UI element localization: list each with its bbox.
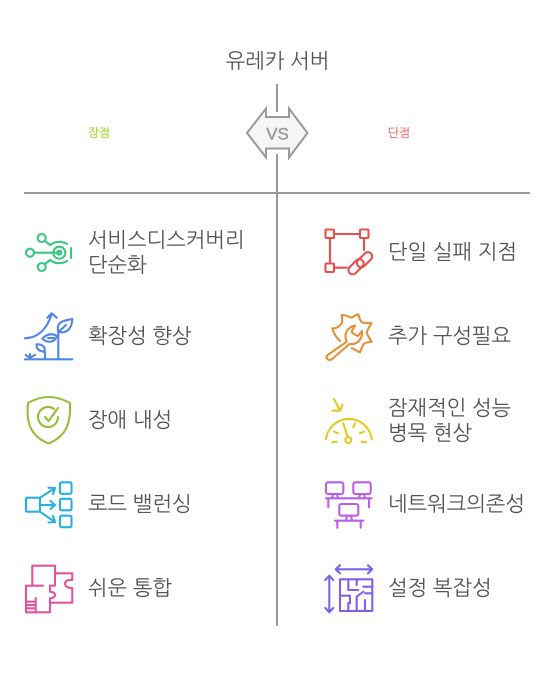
- label: 확장성 향상: [88, 325, 192, 348]
- item: service discovery: [26, 229, 244, 277]
- label: 로드 밸런싱: [88, 493, 192, 516]
- label: 추가 구성필요: [388, 325, 511, 348]
- icon: network nodes: [26, 234, 71, 271]
- item: performance bottleneck: [326, 397, 511, 445]
- icon: gauge: [326, 399, 372, 443]
- item: configuration complexity: [325, 565, 492, 612]
- item: additional configuration: [327, 314, 511, 360]
- item: fault tolerance: [28, 397, 172, 444]
- label: 장애 내성: [88, 409, 172, 432]
- icon: puzzle floor plan: [26, 566, 72, 612]
- icon: maze floor plan: [325, 565, 372, 612]
- item: service discovery: 단순화: [88, 254, 147, 277]
- item: performance bottleneck: 병목 현상: [388, 422, 472, 445]
- icon: shield check: [28, 397, 70, 444]
- label: 네트워크의존성: [388, 493, 525, 516]
- item: single point of failure: [326, 230, 517, 276]
- item: scalability: [25, 313, 192, 359]
- label: 단일 실패 지점: [388, 241, 517, 264]
- VS badge: [247, 108, 308, 158]
- label: 잠재적인 성능: [388, 397, 511, 420]
- label: 서비스디스커버리: [88, 229, 244, 252]
- icon: networked monitors: [326, 482, 372, 528]
- column label: disadvantages: 단점: [388, 126, 410, 140]
- title: 유레카 서버: [226, 50, 329, 73]
- item: easy integration: [26, 566, 172, 612]
- label: 쉬운 통합: [88, 577, 172, 600]
- divider axis: [24, 84, 530, 626]
- icon: load balancer: [26, 482, 72, 527]
- icon: growing plant: [25, 313, 72, 359]
- item: network dependency: [326, 482, 525, 528]
- label: 설정 복잡성: [388, 577, 492, 600]
- column label: advantages: 장점: [88, 126, 110, 140]
- VS badge: VS: [266, 124, 289, 144]
- icon: gear and wrench: [327, 314, 372, 360]
- item: load balancing: [26, 482, 192, 527]
- icon: broken chain square: [326, 230, 374, 276]
